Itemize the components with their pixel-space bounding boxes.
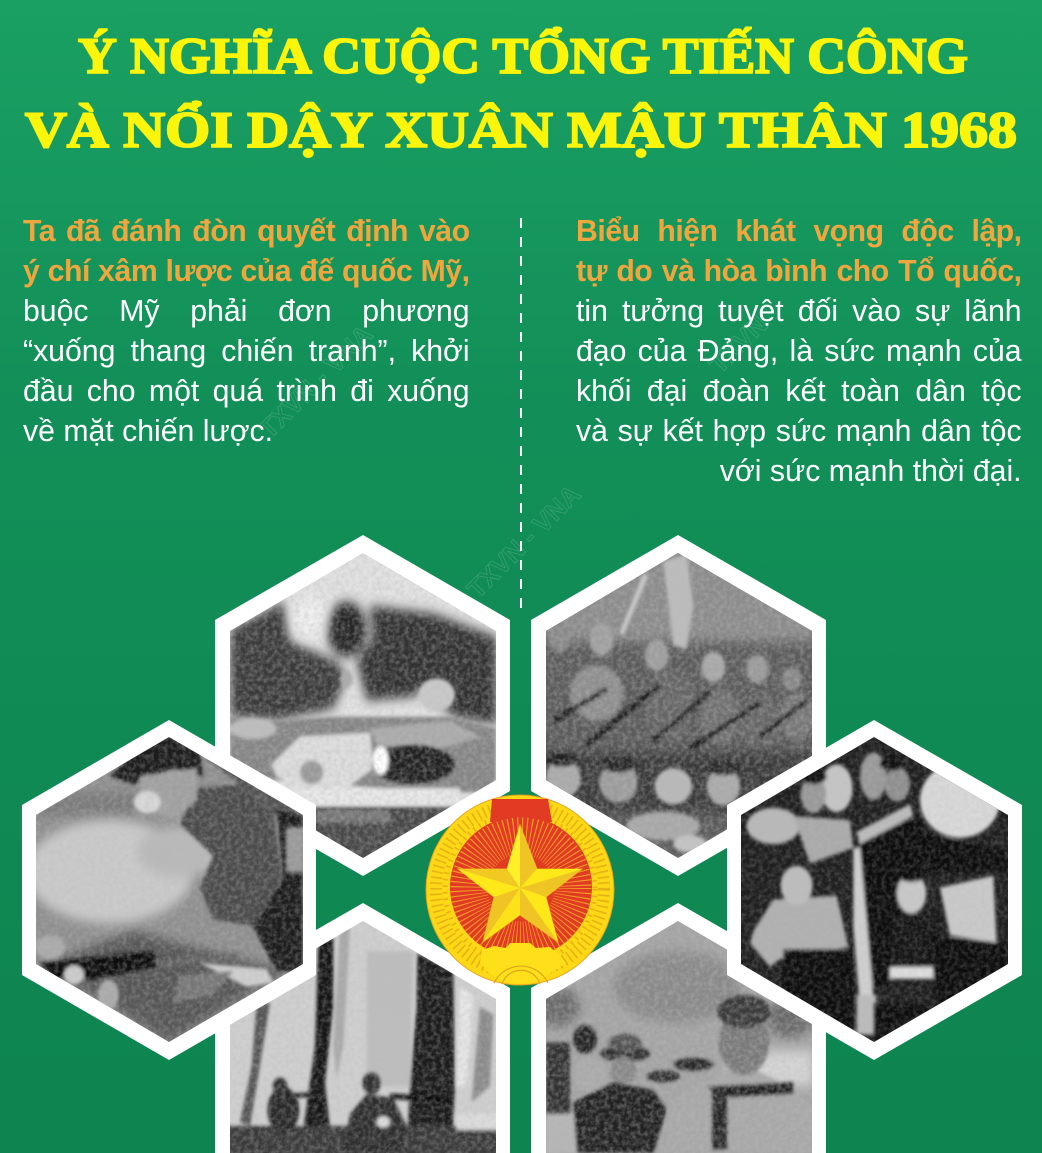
text block: right column: đạo của Đảng, là sức mạnh của xyxy=(576,333,1022,368)
text block: right column xyxy=(576,213,1022,488)
hexagon: bottom-left photo of soldiers in forest xyxy=(215,903,510,1153)
wreath leaves xyxy=(436,805,604,973)
text block: left column: “xuống thang chiến tranh”, khởi xyxy=(23,333,470,368)
hexagon: right photo of guerrilla group xyxy=(727,720,1022,1060)
text block: right column: Biểu hiện khát vọng độc lập, xyxy=(576,213,1022,248)
emblem: yellow wreath with red disc, star and gear xyxy=(426,795,614,985)
text block: left column: đầu cho một quá trình đi xuống xyxy=(23,373,470,408)
hexagon: top-left photo of burning aircraft xyxy=(215,535,510,876)
text block: left column: về mặt chiến lược. xyxy=(23,413,273,448)
hexagon: bottom-right photo of soldiers crossing river xyxy=(531,903,826,1153)
watermarks: TXVN - VNA xyxy=(461,479,587,604)
text block: left column: Ta đã đánh đòn quyết định vào xyxy=(23,213,470,248)
watermarks: TXVN xyxy=(703,309,773,379)
text block: right column: tin tưởng tuyệt đối vào sự lãnh xyxy=(576,293,1022,328)
title xyxy=(25,27,1017,159)
hexagon: top-right photo of troops with rifles xyxy=(531,535,826,876)
dashed divider xyxy=(520,218,522,610)
title: VÀ NỔI DẬY XUÂN MẬU THÂN 1968 xyxy=(25,101,1017,159)
title: Ý NGHĨA CUỘC TỔNG TIẾN CÔNG xyxy=(78,27,968,85)
text block: left column: ý chí xâm lược của đế quốc Mỹ, xyxy=(23,253,470,288)
watermarks: TXVN - VNA xyxy=(253,319,379,444)
text block: right column: tự do và hòa bình cho Tổ quốc, xyxy=(576,253,1022,288)
watermarks xyxy=(253,309,773,604)
text block: right column: với sức mạnh thời đại. xyxy=(720,453,1022,488)
red sun disc xyxy=(450,816,592,958)
text block: right column: và sự kết hợp sức mạnh dân tộc xyxy=(576,413,1022,448)
star xyxy=(458,825,582,942)
text block: left column xyxy=(23,213,470,448)
text block: left column: buộc Mỹ phải đơn phương xyxy=(23,293,470,328)
gear xyxy=(480,943,566,984)
hexagon: left photo of soldier firing xyxy=(22,720,316,1060)
sun rays xyxy=(469,836,573,940)
text block: right column: khối đại đoàn kết toàn dân tộc xyxy=(576,373,1022,408)
